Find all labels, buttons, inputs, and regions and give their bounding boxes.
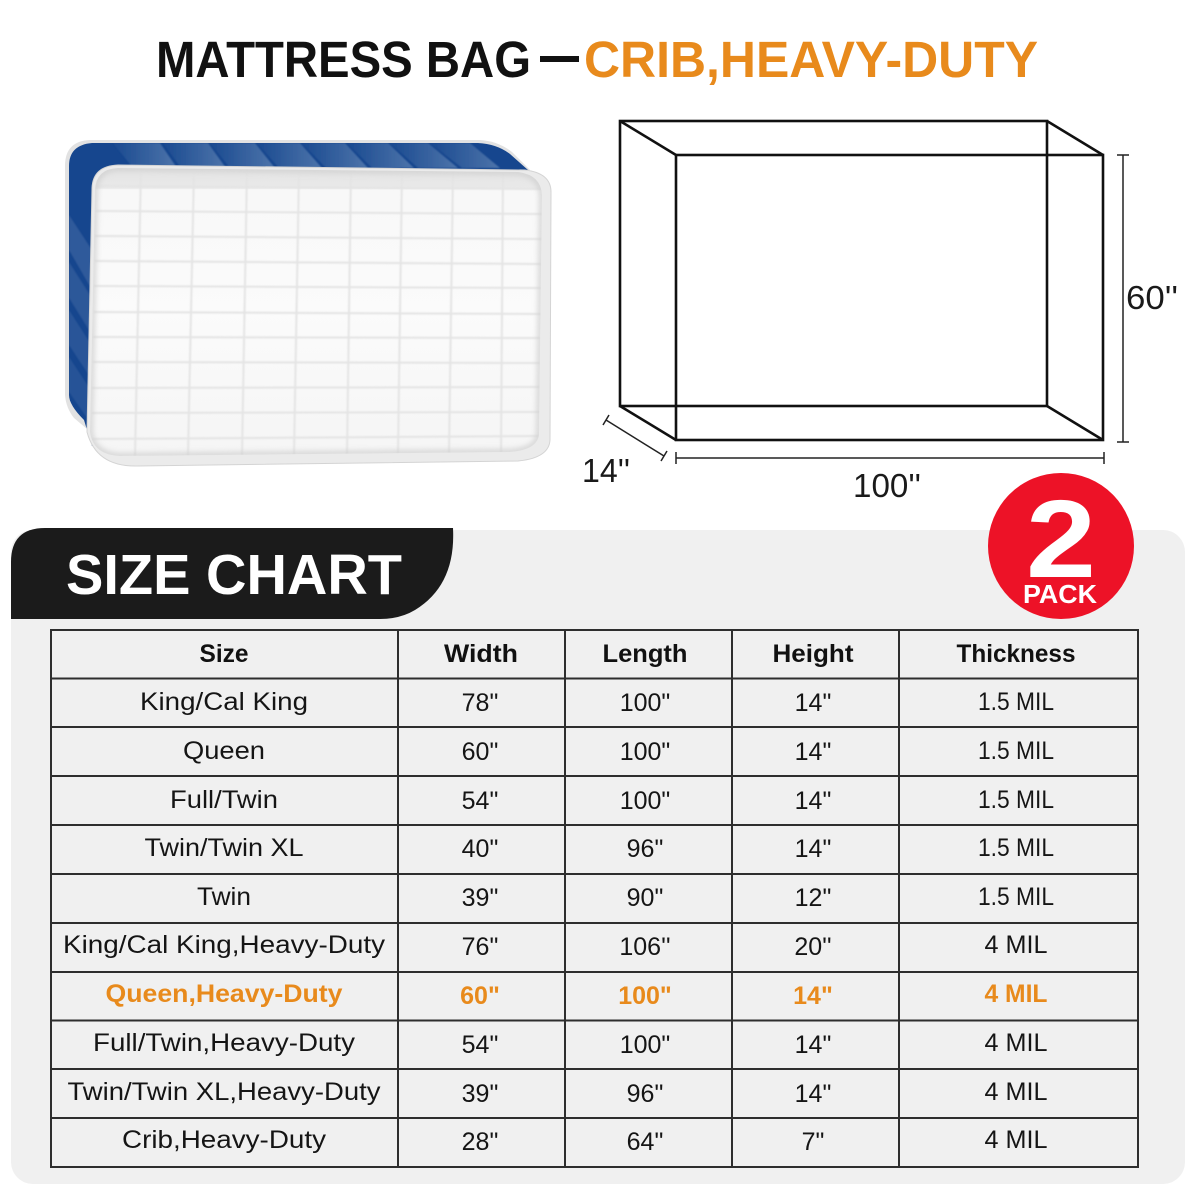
diagram: bag dimensions box (582, 121, 1178, 504)
row: Queen (183, 737, 1054, 766)
row: Twin: Twin (197, 883, 251, 911)
table header row: Length (602, 640, 688, 668)
row: Twin/Twin XL: 40" (462, 835, 498, 863)
row: Twin/Twin XL: 1.5 MIL (978, 834, 1054, 862)
row: Twin/Twin XL, Heavy-Duty: 14" (795, 1080, 831, 1108)
row: King/Cal King, Heavy-Duty: 20'' (794, 933, 832, 961)
row: King/Cal King, Heavy-Duty: King/Cal King,Heavy-Duty (63, 931, 386, 959)
row: Queen: 60" (462, 738, 498, 766)
row: Full/Twin, Heavy-Duty (93, 1029, 1048, 1059)
row: Twin/Twin XL, Heavy-Duty: Twin/Twin XL,Heavy-Duty (68, 1078, 381, 1106)
badge: 2 pack: PACK (1023, 579, 1097, 609)
heading: size chart (11, 528, 453, 619)
row: Twin: 12" (795, 884, 831, 912)
row: King/Cal King, Heavy-Duty: 106'' (619, 933, 671, 961)
badge: 2 pack: 2 (1026, 478, 1096, 601)
dimension: height 60 inches: 60'' (1126, 279, 1178, 316)
table header row: Height (772, 640, 854, 668)
icon: quilted mattress (65, 140, 551, 466)
row: Full/Twin, Heavy-Duty: Full/Twin,Heavy-Duty (93, 1029, 356, 1057)
row: Queen, Heavy-Duty highlighted: Queen,Heavy-Duty (106, 980, 343, 1008)
dimension: length 100 inches (676, 452, 1104, 504)
row: Twin/Twin XL, Heavy-Duty: 96" (627, 1080, 663, 1108)
row: Twin/Twin XL (144, 834, 1054, 863)
dimension: depth 14 inches: 14'' (582, 452, 630, 489)
row: Crib, Heavy-Duty (122, 1126, 1048, 1156)
row: Queen, Heavy-Duty highlighted: 60" (460, 982, 500, 1010)
row: Queen, Heavy-Duty highlighted: 4 MIL (984, 980, 1048, 1008)
dimension: height 60 inches (1117, 155, 1178, 442)
row: Twin/Twin XL, Heavy-Duty (68, 1078, 1048, 1108)
row: King/Cal King (140, 688, 1054, 717)
row: Twin/Twin XL: 96" (627, 835, 663, 863)
mattress back side in blue (65, 140, 530, 446)
row: Crib, Heavy-Duty: Crib,Heavy-Duty (122, 1126, 327, 1154)
heading: size chart: SIZE CHART (66, 543, 402, 607)
mattress front quilted panel (87, 165, 551, 466)
title: MATTRESS BAG (156, 31, 531, 88)
panel: size chart background (11, 530, 1185, 1184)
row: Crib, Heavy-Duty: 4 MIL (984, 1126, 1048, 1154)
table header row: Width (444, 640, 518, 668)
row: Full/Twin: 14" (795, 787, 831, 815)
row: Queen: 100" (620, 738, 670, 766)
row: Full/Twin, Heavy-Duty: 100" (620, 1031, 670, 1059)
row: King/Cal King, Heavy-Duty: 76" (462, 933, 498, 961)
row: Full/Twin, Heavy-Duty: 14" (795, 1031, 831, 1059)
row: Queen: Queen (183, 737, 265, 765)
title: CRIB,HEAVY-DUTY (584, 31, 1038, 88)
row: Crib, Heavy-Duty: 7" (802, 1128, 824, 1156)
row: Full/Twin, Heavy-Duty: 54" (462, 1031, 498, 1059)
row: Twin/Twin XL: Twin/Twin XL (144, 834, 304, 862)
row: Twin/Twin XL, Heavy-Duty: 39" (462, 1080, 498, 1108)
row: Queen, Heavy-Duty highlighted: 14" (793, 982, 833, 1010)
table: size chart (51, 630, 1138, 1167)
row: Twin/Twin XL: 14" (795, 835, 831, 863)
table header row: Thickness (956, 640, 1076, 668)
row: Full/Twin (170, 786, 1054, 815)
row: Crib, Heavy-Duty: 64" (627, 1128, 663, 1156)
row: Queen, Heavy-Duty highlighted (106, 980, 1048, 1010)
row: Twin: 90" (627, 884, 663, 912)
dimension: depth 14 inches (582, 415, 667, 489)
row: Twin: 1.5 MIL (978, 883, 1054, 911)
row: King/Cal King, Heavy-Duty: 4 MIL (984, 931, 1048, 959)
row: Full/Twin: 1.5 MIL (978, 786, 1054, 814)
row: Twin/Twin XL, Heavy-Duty: 4 MIL (984, 1078, 1048, 1106)
row: Twin (197, 883, 1054, 912)
title (156, 31, 1038, 88)
table grid (51, 630, 1138, 1167)
badge: 2 pack (988, 473, 1134, 619)
row: King/Cal King: 100" (620, 689, 670, 717)
row: Full/Twin: Full/Twin (170, 786, 278, 814)
row: Queen: 14" (795, 738, 831, 766)
row: King/Cal King: King/Cal King (140, 688, 308, 716)
table header row: Size (200, 640, 249, 668)
row: Full/Twin, Heavy-Duty: 4 MIL (984, 1029, 1048, 1057)
row: Queen, Heavy-Duty highlighted: 100" (618, 982, 672, 1010)
row: Full/Twin: 100" (620, 787, 670, 815)
row: Crib, Heavy-Duty: 28" (462, 1128, 498, 1156)
row: King/Cal King: 78" (462, 689, 498, 717)
dimension: length 100 inches: 100'' (853, 467, 921, 504)
row: King/Cal King, Heavy-Duty (63, 931, 1048, 961)
row: Twin: 39" (462, 884, 498, 912)
row: King/Cal King: 1.5 MIL (978, 688, 1054, 716)
row: Queen: 1.5 MIL (978, 737, 1054, 765)
row: King/Cal King: 14" (795, 689, 831, 717)
row: Full/Twin: 54" (462, 787, 498, 815)
table header row (200, 640, 1076, 668)
